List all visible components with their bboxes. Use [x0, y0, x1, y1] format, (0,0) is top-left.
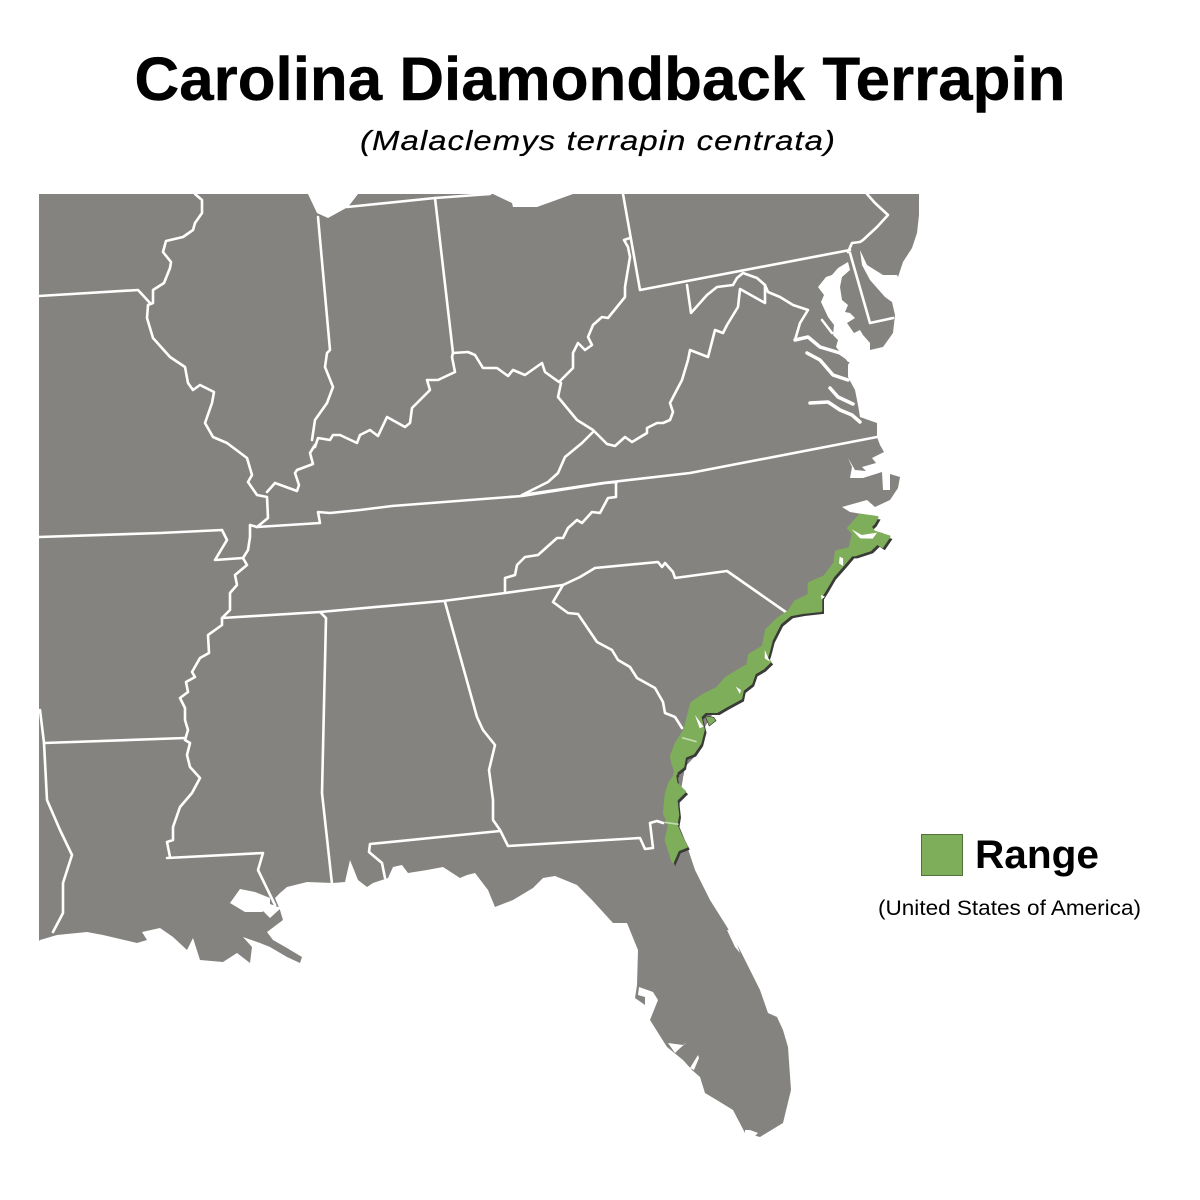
range fill [664, 515, 889, 862]
range island [705, 716, 716, 726]
range inlets [683, 529, 877, 783]
map: southeastern United States [39, 194, 919, 1140]
range shadow [667, 518, 891, 864]
legend note: (United States of America) [878, 897, 1141, 920]
legend label: Range [975, 833, 1099, 877]
pale state lines across the range [664, 738, 697, 824]
legend swatch [922, 834, 962, 876]
land mass [39, 194, 919, 1137]
legend [878, 833, 1141, 920]
state borders [39, 194, 893, 932]
range area along the coast [664, 515, 891, 864]
Chesapeake Bay, lakes and bays [144, 262, 872, 1140]
title: Carolina Diamondback Terrapin [134, 45, 1066, 113]
subtitle: scientific name: (Malaclemys terrapin centrata) [360, 125, 836, 156]
rivers [795, 320, 860, 422]
